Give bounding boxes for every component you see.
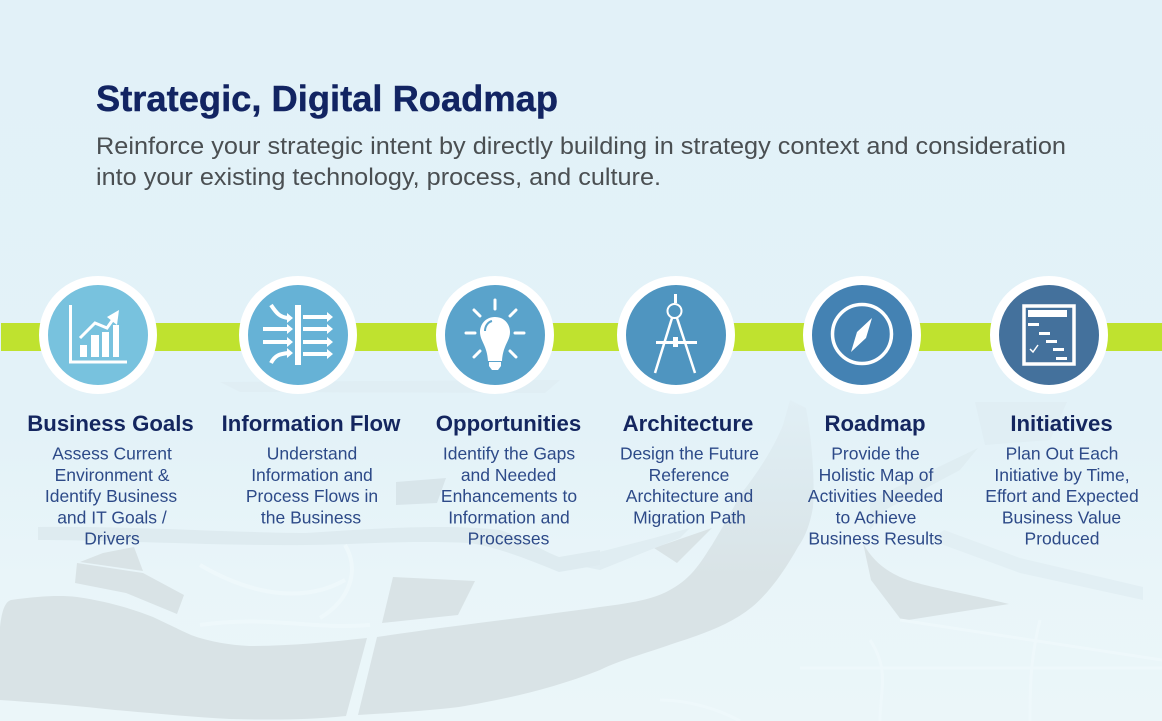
heading: Business Goals bbox=[27, 411, 194, 436]
description: Identify the Gaps bbox=[443, 444, 575, 464]
description: Processes bbox=[468, 528, 550, 548]
description bbox=[246, 444, 378, 528]
description bbox=[620, 444, 759, 528]
title: Strategic, Digital Roadmap bbox=[96, 78, 558, 119]
map background bbox=[0, 380, 1162, 721]
heading: Architecture bbox=[623, 411, 753, 436]
description bbox=[985, 444, 1139, 548]
icon: light bulb bbox=[440, 280, 550, 390]
description: Information and bbox=[251, 465, 373, 485]
timeline bar bbox=[1, 323, 1162, 351]
description: Understand bbox=[267, 444, 357, 464]
description: Initiative by Time, bbox=[994, 465, 1130, 485]
description: to Achieve bbox=[836, 508, 916, 528]
step: Architecture bbox=[620, 280, 759, 528]
icon: growth chart bbox=[44, 280, 152, 390]
step: Initiatives bbox=[985, 280, 1139, 548]
description: Design the Future bbox=[620, 444, 759, 464]
description: Business Results bbox=[808, 528, 943, 548]
icon: navigation compass bbox=[808, 280, 916, 390]
description: the Business bbox=[261, 508, 361, 528]
description: Business Value bbox=[1002, 508, 1121, 528]
step: Opportunities bbox=[436, 280, 581, 548]
icon: drafting compass bbox=[622, 280, 730, 390]
subtitle: Reinforce your strategic intent by directly building in strategy context and consideration bbox=[96, 133, 1066, 160]
description: Identify Business bbox=[45, 486, 177, 506]
icon: gantt chart bbox=[994, 280, 1104, 390]
description: Process Flows in bbox=[246, 486, 378, 506]
description: Effort and Expected bbox=[985, 486, 1139, 506]
description: and Needed bbox=[461, 465, 556, 485]
description: Drivers bbox=[84, 528, 140, 548]
description: Architecture and bbox=[626, 486, 753, 506]
description: Holistic Map of bbox=[819, 465, 934, 485]
heading: Initiatives bbox=[1010, 411, 1113, 436]
description: Enhancements to bbox=[441, 486, 577, 506]
description bbox=[808, 444, 943, 548]
description: Reference bbox=[649, 465, 729, 485]
step: Roadmap bbox=[808, 280, 943, 548]
description: Migration Path bbox=[633, 508, 746, 528]
description bbox=[45, 444, 177, 548]
description: Produced bbox=[1025, 528, 1099, 548]
heading: Information Flow bbox=[222, 411, 401, 436]
description: Environment & bbox=[55, 465, 170, 485]
description: Assess Current bbox=[52, 444, 172, 464]
description: Provide the bbox=[831, 444, 920, 464]
description: and IT Goals / bbox=[57, 508, 167, 528]
description: Activities Needed bbox=[808, 486, 943, 506]
subtitle: into your existing technology, process, and culture. bbox=[96, 164, 661, 191]
subtitle bbox=[96, 133, 1066, 191]
description bbox=[441, 444, 577, 548]
step: Business Goals bbox=[27, 280, 194, 548]
description: Plan Out Each bbox=[1006, 444, 1118, 464]
description: Information and bbox=[448, 508, 570, 528]
heading: Roadmap bbox=[824, 411, 926, 436]
heading: Opportunities bbox=[436, 411, 581, 436]
icon: flow arrows bbox=[244, 280, 352, 390]
step: Information Flow bbox=[222, 280, 401, 528]
